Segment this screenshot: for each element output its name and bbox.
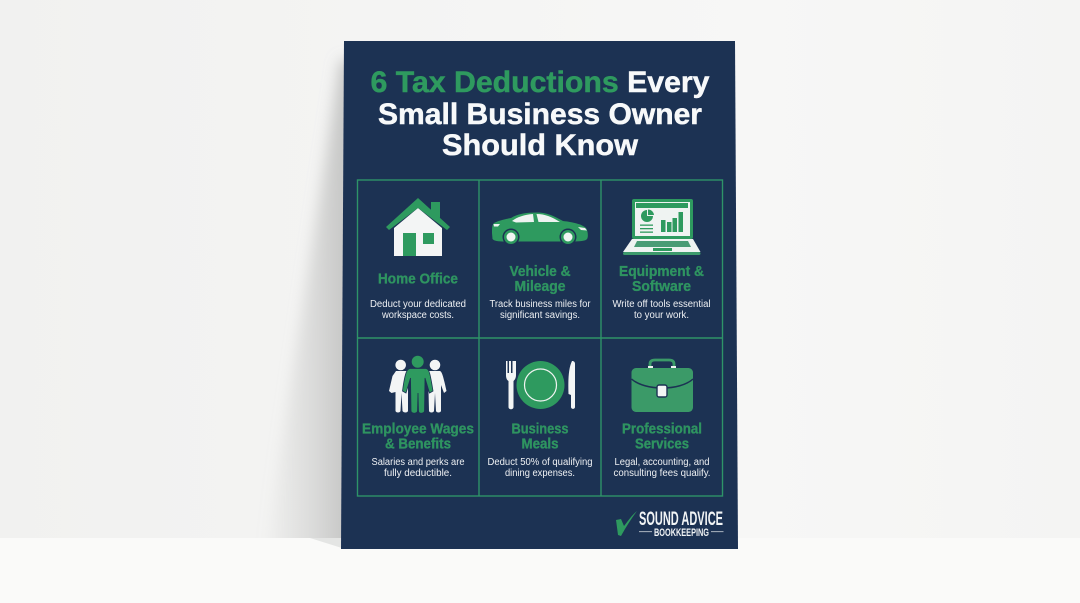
- icon: car: [492, 212, 588, 246]
- logo wordmark: SOUND ADVICE: [639, 509, 723, 530]
- description: vehicle and mileage: [490, 299, 591, 321]
- heading: vehicle and mileage: Vehicle &: [510, 264, 571, 280]
- description: employee wages and benefits: fully deductible.: [384, 468, 452, 479]
- icon: three people: [389, 356, 446, 413]
- panel: vehicle and mileage: [490, 212, 591, 321]
- title: 6 Tax Deductions Every: [370, 66, 710, 99]
- heading: professional services: Services: [635, 436, 689, 452]
- description: vehicle and mileage: Track business miles for: [490, 299, 591, 310]
- description: equipment and software: Write off tools essential: [612, 299, 710, 310]
- heading: professional services: Professional: [622, 422, 702, 438]
- heading: home office: Home Office: [378, 272, 458, 288]
- poster: [341, 41, 738, 549]
- description: business meals: dining expenses.: [505, 468, 575, 479]
- description: equipment and software: to your work.: [634, 310, 689, 321]
- heading: vehicle and mileage: Mileage: [514, 279, 566, 295]
- heading: business meals: Business: [512, 422, 568, 438]
- description: business meals: Deduct 50% of qualifying: [488, 457, 592, 468]
- description: employee wages and benefits: [372, 457, 465, 479]
- floor: [0, 538, 1080, 603]
- heading: business meals: Meals: [522, 436, 558, 452]
- title: Small Business Owner: [378, 98, 702, 131]
- icon: plate and cutlery: [506, 361, 575, 409]
- panel: home office: [370, 198, 466, 321]
- panel: professional services: [614, 360, 710, 479]
- heading: equipment and software: Equipment &: [619, 264, 704, 280]
- description: employee wages and benefits: Salaries and perks are: [372, 457, 465, 468]
- heading: business meals: [512, 422, 568, 452]
- poster floor shadow: [310, 538, 345, 549]
- description: home office: [370, 299, 466, 321]
- title: [370, 66, 710, 162]
- heading: professional services: [622, 422, 702, 452]
- heading: employee wages and benefits: [362, 422, 474, 452]
- panel: employee wages and benefits: [362, 356, 474, 479]
- heading: equipment and software: Software: [632, 279, 691, 295]
- heading: employee wages and benefits: Employee Wages: [362, 422, 474, 438]
- icon: briefcase: [632, 360, 693, 412]
- logo: sound advice bookkeeping: [616, 509, 724, 539]
- description: home office: workspace costs.: [381, 310, 454, 321]
- description: home office: Deduct your dedicated: [370, 299, 466, 310]
- description: equipment and software: [612, 299, 710, 321]
- description: business meals: [488, 457, 592, 479]
- heading: equipment and software: [619, 264, 704, 295]
- description: professional services: consulting fees qualify.: [614, 468, 710, 479]
- title: Should Know: [442, 129, 639, 162]
- icon: laptop: [623, 199, 700, 255]
- logo wordmark: BOOKKEEPING: [654, 527, 709, 539]
- panel: business meals: [488, 361, 592, 479]
- icon: house: [386, 198, 450, 256]
- description: professional services: [614, 457, 710, 479]
- icon: check mark: [616, 511, 637, 536]
- heading: vehicle and mileage: [510, 264, 571, 295]
- poster shadow on wall: [280, 56, 344, 538]
- description: vehicle and mileage: significant savings.: [500, 310, 580, 321]
- heading: employee wages and benefits: & Benefits: [385, 436, 451, 452]
- panel: equipment and software: [612, 199, 710, 321]
- description: professional services: Legal, accounting, and: [614, 457, 710, 468]
- grid of six cells: [358, 180, 722, 496]
- logo wordmark: [639, 509, 724, 539]
